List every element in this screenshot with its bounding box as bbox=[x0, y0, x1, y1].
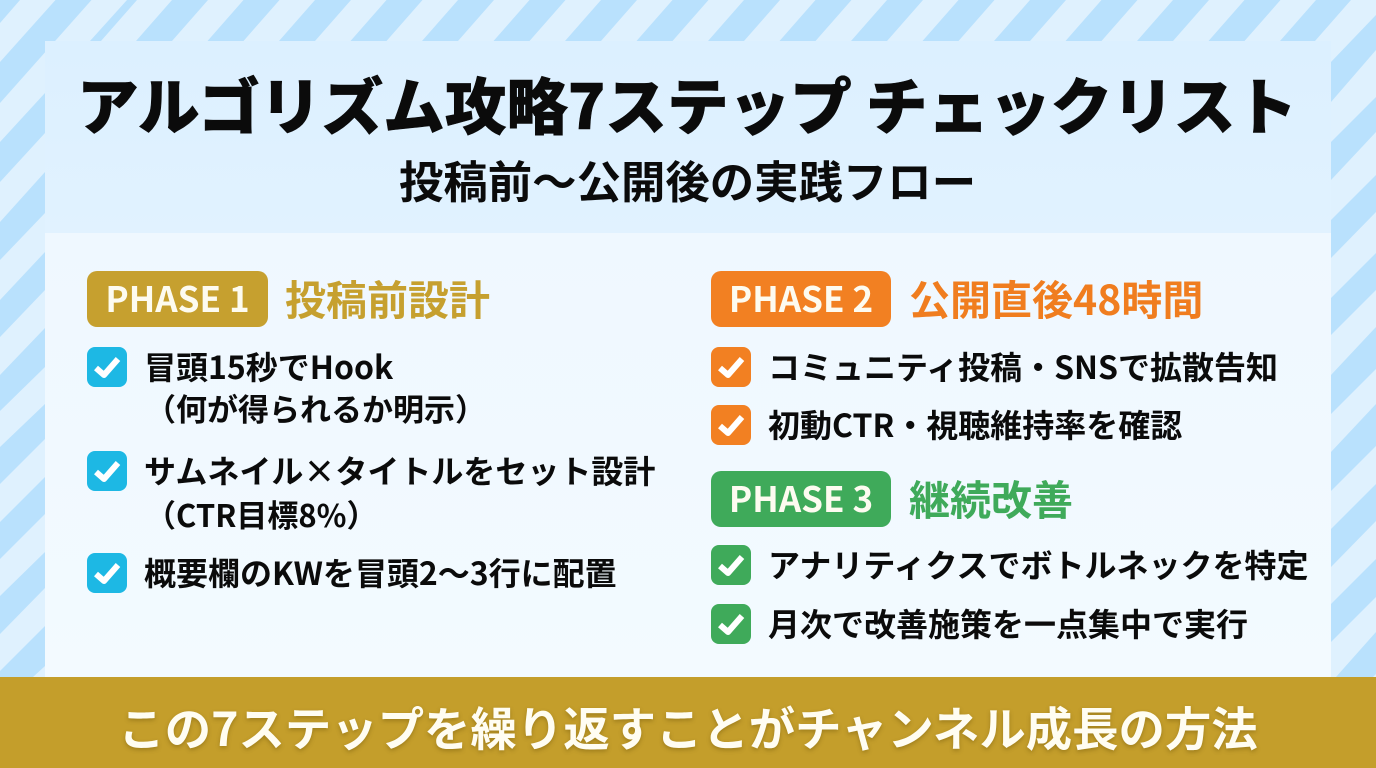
footer banner: この7ステップを繰り返すことがチャンネル成長の方法 bbox=[118, 693, 1258, 760]
panel: phase 3 bbox=[711, 467, 1308, 646]
check item 6: アナリティクスでボトルネックを特定 bbox=[768, 540, 1308, 586]
check item 4: コミュニティ投稿・SNSで拡散告知 bbox=[768, 342, 1278, 388]
check item 1: 冒頭15秒でHook bbox=[144, 342, 393, 388]
check item 2: （CTR目標8%） bbox=[145, 490, 378, 536]
check item 1: （何が得られるか明示） bbox=[145, 384, 486, 430]
subtitle: 投稿前〜公開後の実践フロー bbox=[399, 146, 976, 211]
check item 7: 月次で改善施策を一点集中で実行 bbox=[768, 600, 1248, 646]
check item 1 bbox=[87, 342, 486, 430]
phase 3 badge: PHASE 3 bbox=[729, 472, 873, 523]
panel: checklist body bbox=[45, 233, 1331, 677]
panel: phase 1 bbox=[87, 267, 655, 594]
check item 2 bbox=[87, 446, 655, 536]
check item 3: 概要欄のKWを冒頭2〜3行に配置 bbox=[144, 548, 617, 594]
panel: header bbox=[45, 41, 1331, 233]
check item 2: サムネイル×タイトルをセット設計 bbox=[144, 446, 655, 492]
panel: phase 2 bbox=[711, 267, 1278, 446]
phase 1 heading: 投稿前設計 bbox=[285, 267, 490, 327]
title: アルゴリズム攻略7ステップ チェックリスト bbox=[77, 58, 1297, 147]
phase 1 badge: PHASE 1 bbox=[105, 272, 250, 323]
phase 3 heading: 継続改善 bbox=[909, 467, 1073, 527]
footer banner bbox=[0, 677, 1376, 768]
phase 2 heading: 公開直後48時間 bbox=[909, 267, 1203, 327]
phase 2 badge: PHASE 2 bbox=[729, 272, 873, 323]
check item 5: 初動CTR・視聴維持率を確認 bbox=[768, 400, 1182, 446]
